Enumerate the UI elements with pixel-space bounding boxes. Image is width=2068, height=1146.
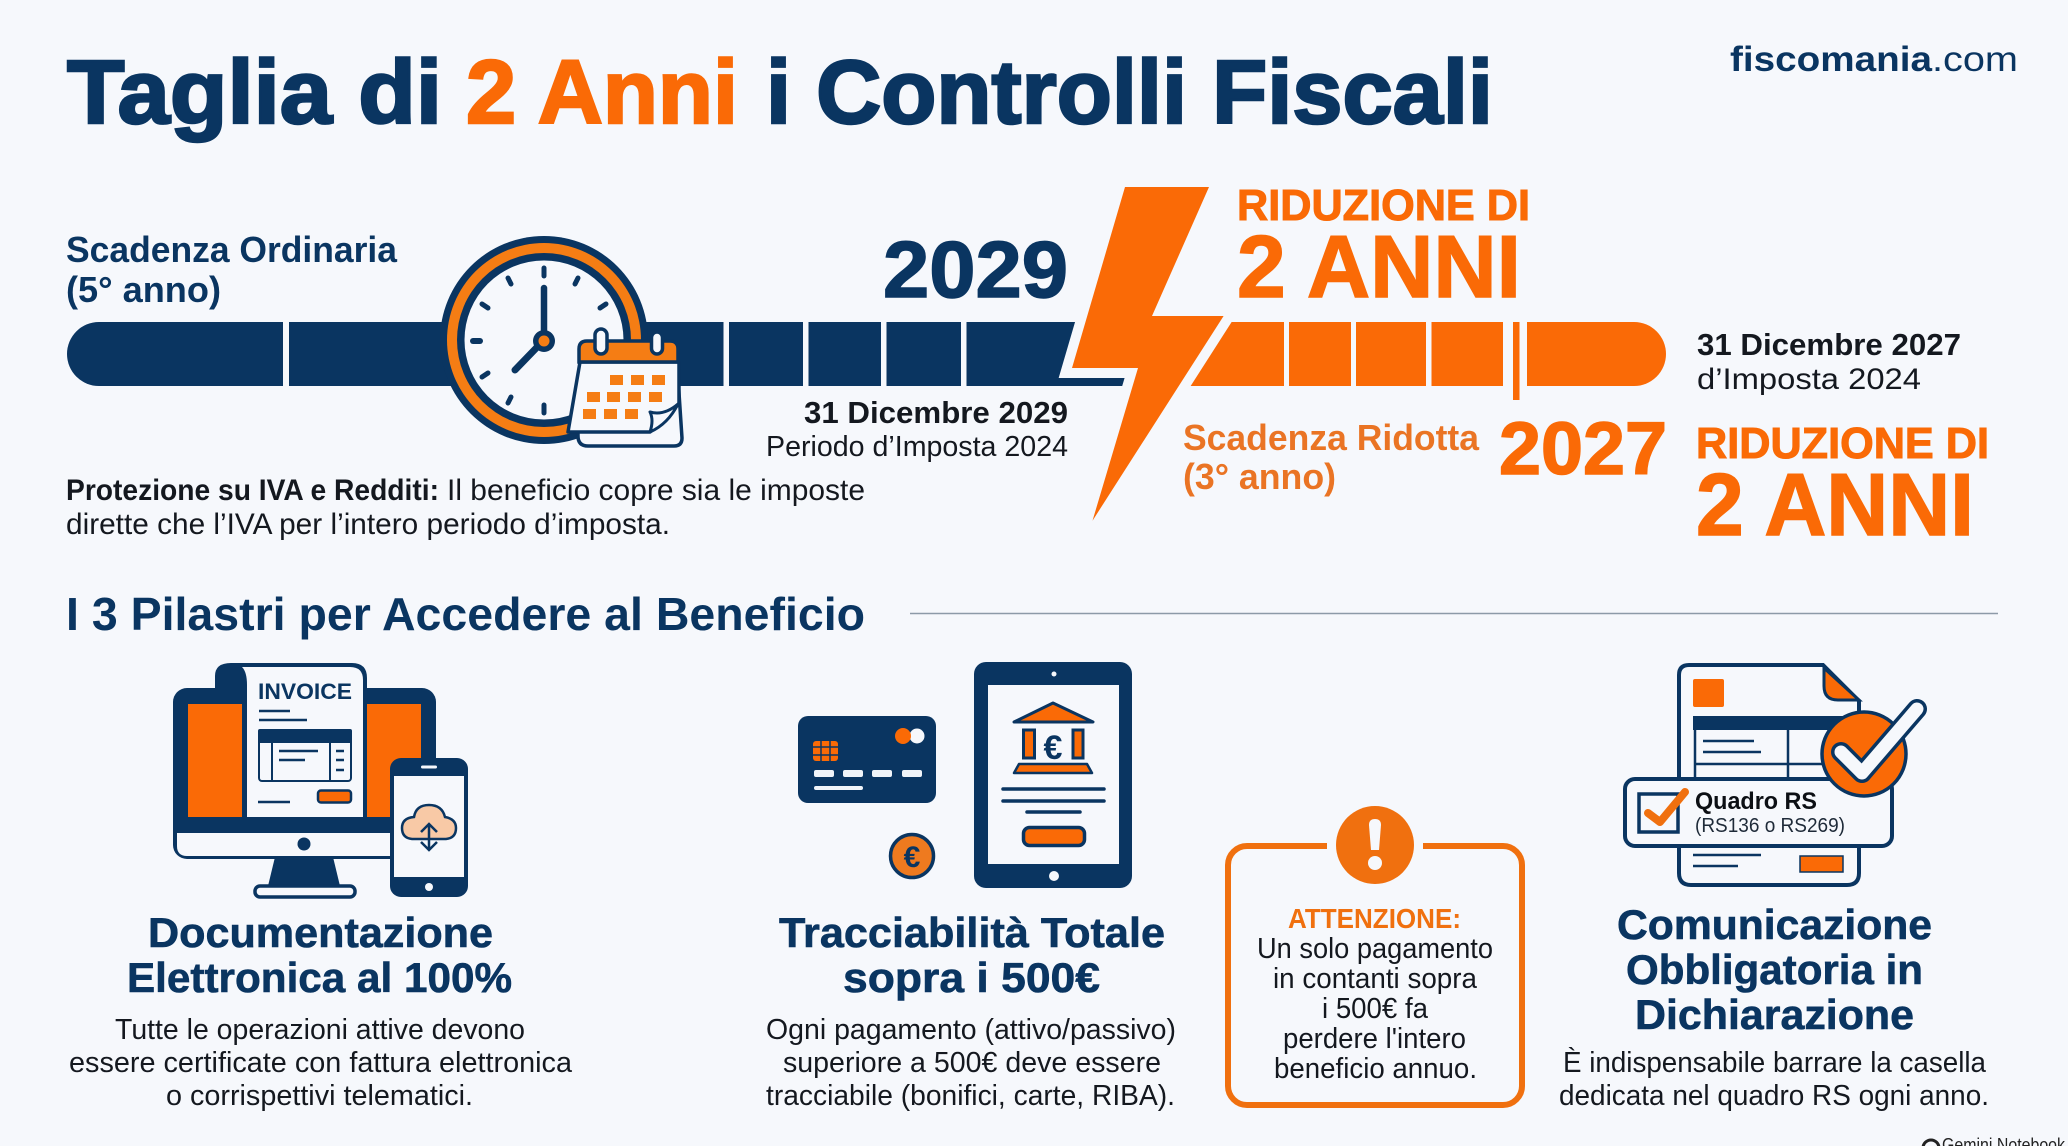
date: 31 dicembre 2027 <box>1697 327 1961 396</box>
callout: riduzione di 2 anni (top): RIDUZIONE DI <box>1237 181 1530 230</box>
callout: riduzione di 2 anni (top): 2 ANNI <box>1237 217 1521 316</box>
title <box>67 43 1493 143</box>
date: 31 dicembre 2027: 31 Dicembre 2027 <box>1697 327 1961 362</box>
text: documentazione body <box>69 1014 573 1112</box>
text: comunicazione body <box>1559 1046 1989 1112</box>
heading: documentazione elettronica: Elettronica al 100% <box>127 954 512 1001</box>
icon: monitor with invoice and phone <box>173 663 468 897</box>
year 2029: 2029 <box>883 225 1068 314</box>
heading: comunicazione obbligatoria: Obbligatoria in <box>1626 946 1923 993</box>
text: attenzione: beneficio annuo. <box>1274 1053 1477 1085</box>
logo: fiscomania.com: .com <box>1932 40 2018 79</box>
icon: euro coin <box>890 834 934 878</box>
heading: comunicazione obbligatoria: Comunicazione <box>1617 901 1932 948</box>
icon: credit card <box>798 716 936 803</box>
logo: fiscomania.com: fiscomania <box>1730 40 1933 79</box>
text: attenzione: Un solo pagamento <box>1257 933 1493 965</box>
logo: fiscomania.com <box>1730 40 2018 79</box>
title: Taglia di <box>67 43 442 143</box>
icon: document with quadro rs <box>1625 665 1917 885</box>
heading: documentazione elettronica <box>127 909 512 1001</box>
callout: riduzione di 2 anni (right): RIDUZIONE DI <box>1696 419 1989 468</box>
title: 2 Anni <box>466 43 738 143</box>
text: attenzione: in contanti sopra <box>1273 963 1478 995</box>
panel: tracciabilita totale <box>766 662 1176 1112</box>
heading: comunicazione obbligatoria <box>1617 901 1932 1038</box>
heading: tracciabilita totale <box>779 909 1165 1001</box>
year 2027: 2027 <box>1499 407 1667 490</box>
callout: attenzione <box>1228 806 1522 1105</box>
icon: calendar <box>568 329 682 446</box>
icon: euro coin: € <box>904 841 921 874</box>
heading: tracciabilita totale: sopra i 500€ <box>843 954 1100 1001</box>
date: 31 dicembre 2027: d’Imposta 2024 <box>1697 363 1921 396</box>
text: tracciabilita body <box>766 1014 1176 1112</box>
text: documentazione body: Tutte le operazioni attive devono <box>115 1014 525 1046</box>
label: scadenza ordinaria: Scadenza Ordinaria <box>66 229 398 270</box>
icon: tablet with bank: € <box>1044 729 1063 767</box>
icon: lightning bolt <box>1072 187 1224 521</box>
label: scadenza ordinaria <box>66 229 398 310</box>
text: invoice: INVOICE <box>258 679 352 704</box>
text: quadro rs <box>1695 788 1845 837</box>
label: scadenza ridotta: Scadenza Ridotta <box>1183 417 1480 458</box>
label: scadenza ridotta <box>1183 417 1480 497</box>
icon: clock and calendar <box>440 236 682 446</box>
text: attenzione <box>1257 903 1493 1085</box>
text: protezione su iva e redditi: Protezione su IVA e Redditi: <box>66 474 439 507</box>
text: quadro rs: Quadro RS <box>1695 788 1817 815</box>
text: documentazione body: essere certificate con fattura elettronica <box>69 1047 573 1079</box>
panel: documentazione elettronica <box>69 663 573 1112</box>
heading: documentazione elettronica: Documentazione <box>148 909 493 956</box>
text: protezione su iva e redditi: Il beneficio copre sia le imposte <box>447 474 865 507</box>
heading: tracciabilita totale: Tracciabilità Totale <box>779 909 1165 956</box>
text: attenzione: ATTENZIONE: <box>1288 903 1461 934</box>
text: tracciabilita body: superiore a 500€ deve essere <box>783 1047 1161 1079</box>
text: comunicazione body: dedicata nel quadro RS ogni anno. <box>1559 1080 1989 1112</box>
text: tracciabilita body: tracciabile (bonifici, carte, RIBA). <box>766 1080 1175 1112</box>
orange timeline bar <box>1190 322 1666 400</box>
heading: comunicazione obbligatoria: Dichiarazione <box>1635 991 1914 1038</box>
panel: comunicazione obbligatoria <box>1559 665 1989 1112</box>
text: attenzione: perdere l'intero <box>1283 1023 1466 1055</box>
text: protezione su iva e redditi: dirette che l’IVA per l’intero periodo d’imposta. <box>66 508 670 541</box>
heading: i 3 pilastri: I 3 Pilastri per Accedere al Beneficio <box>66 588 865 640</box>
icon: tablet with bank <box>974 662 1132 888</box>
title: i Controlli Fiscali <box>766 43 1493 143</box>
text: quadro rs: (RS136 o RS269) <box>1695 815 1845 837</box>
date: 31 dicembre 2029: Periodo d’Imposta 2024 <box>766 431 1068 463</box>
navy timeline bar <box>67 322 1135 386</box>
text: protezione su iva e redditi <box>66 474 865 541</box>
label: scadenza ordinaria: (5° anno) <box>66 269 221 310</box>
text: tracciabilita body: Ogni pagamento (attivo/passivo) <box>766 1014 1176 1046</box>
date: 31 dicembre 2029: 31 Dicembre 2029 <box>804 395 1068 430</box>
text: comunicazione body: È indispensabile barrare la casella <box>1563 1046 1987 1079</box>
callout: riduzione di 2 anni (right): 2 ANNI <box>1696 455 1974 554</box>
text: documentazione body: o corrispettivi telematici. <box>166 1080 473 1112</box>
date: 31 dicembre 2029 <box>766 395 1068 463</box>
label: scadenza ridotta: (3° anno) <box>1183 456 1336 497</box>
text: attenzione: i 500€ fa <box>1322 993 1429 1025</box>
icon: exclamation mark <box>1336 806 1414 884</box>
